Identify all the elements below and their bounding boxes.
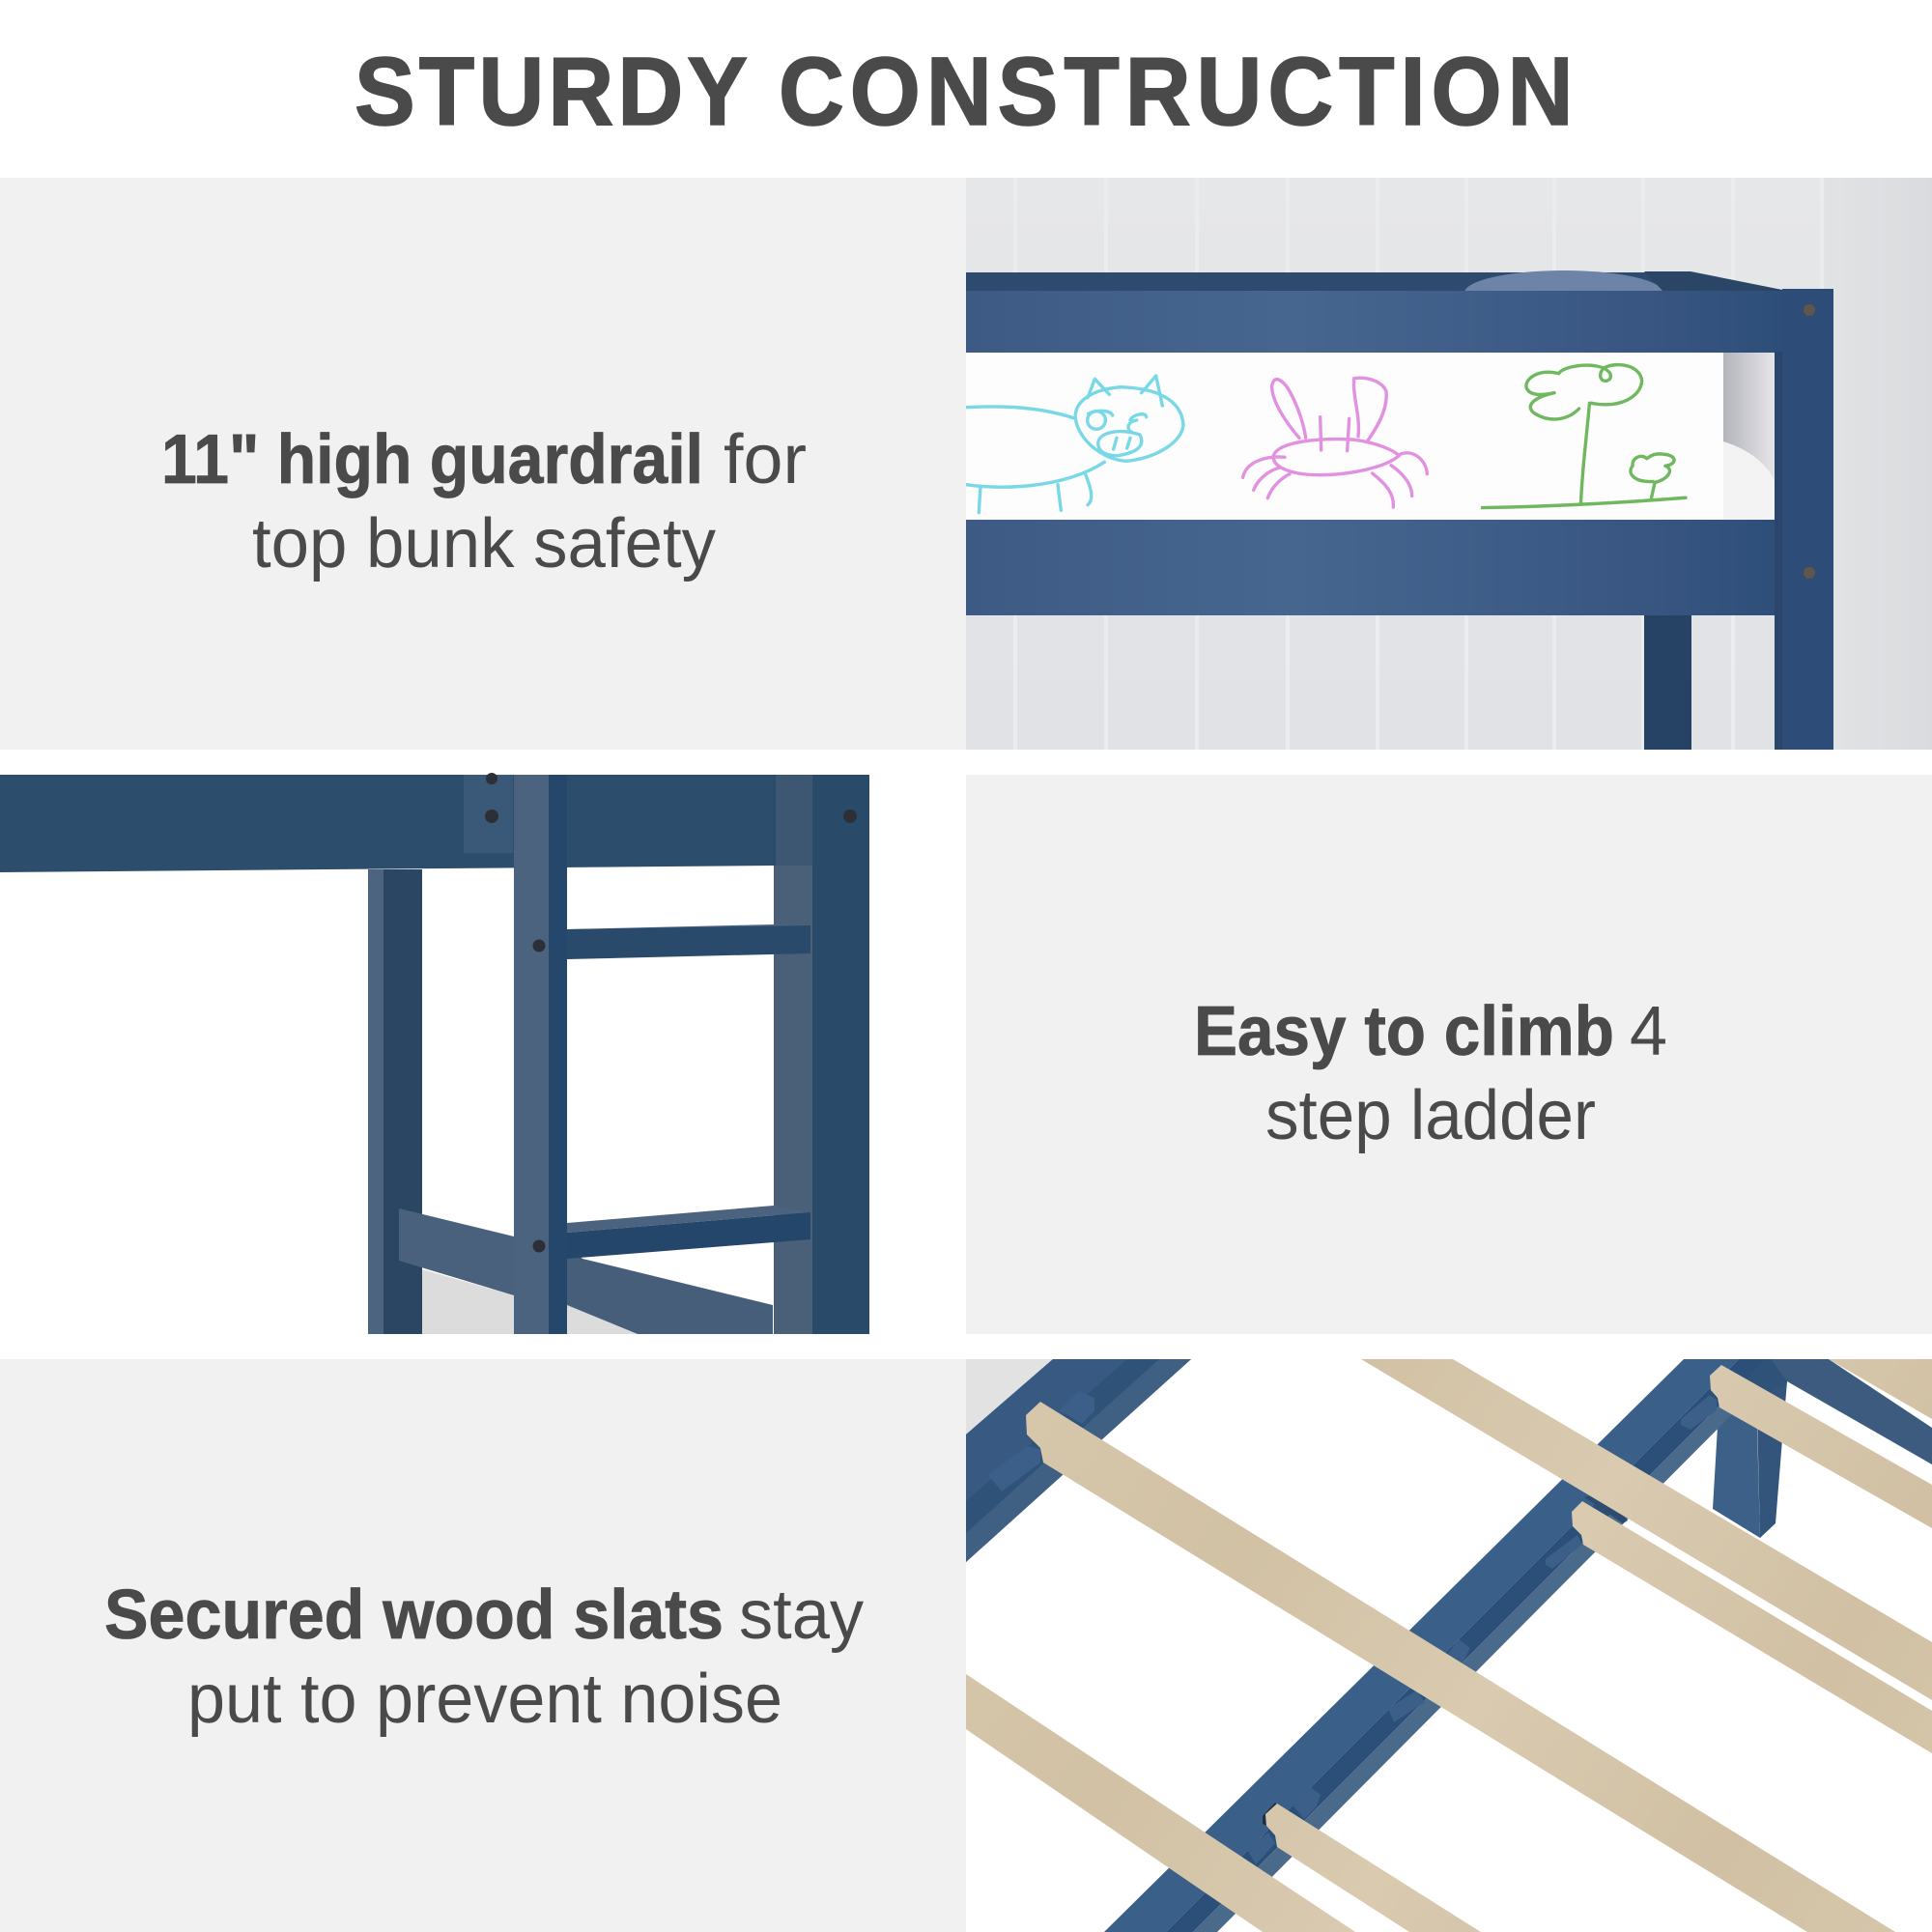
panel: guardrail caption: 11" high guardrail (161, 421, 703, 498)
panel: slats photo (966, 1359, 1932, 1932)
left post (368, 869, 422, 1334)
panel: ladder caption: Easy to climb (1194, 993, 1614, 1070)
rung lower (567, 1206, 810, 1259)
pillow (1464, 270, 1662, 291)
panel: guardrail caption: for (724, 421, 807, 498)
panel: slats caption: Secured wood slats (104, 1577, 724, 1654)
panel: slats caption: stay (739, 1577, 864, 1654)
panel: ladder caption (966, 775, 1932, 1334)
rail: left (966, 1359, 1191, 1562)
rail: center (1104, 1359, 1766, 1932)
wood slats (966, 1359, 1932, 1932)
front post (1775, 289, 1833, 750)
ladder rail (514, 775, 567, 1334)
lower guardrail (966, 520, 1782, 615)
drawings (966, 376, 1427, 513)
side rail (1644, 271, 1782, 292)
back post (1644, 615, 1691, 750)
panel: guardrail caption (0, 178, 966, 750)
title (355, 37, 1573, 146)
wall planks (1015, 178, 1822, 750)
panel: ladder caption: 4 (1630, 993, 1667, 1070)
panel: guardrail photo (966, 178, 1932, 750)
drawing: pig (966, 376, 1183, 513)
post joint (1747, 1359, 1787, 1385)
beam (0, 775, 869, 872)
panel: guardrail caption: top bunk safety (252, 505, 716, 582)
drawing: rabbit (1243, 378, 1427, 507)
wood: top right corner (1829, 1359, 1932, 1419)
lower diagonal rail (399, 1208, 773, 1334)
rung upper (567, 924, 810, 959)
whiteboard (966, 353, 1723, 521)
top guardrail (966, 291, 1782, 353)
rail cleats (1246, 1395, 1717, 1864)
panel: ladder caption: step ladder (1265, 1077, 1596, 1154)
title: CONSTRUCTION (779, 37, 1573, 146)
title: STURDY (355, 37, 748, 146)
panel: ladder photo (0, 773, 869, 1334)
inner rail (966, 272, 1666, 292)
panel: slats caption: put to prevent noise (187, 1661, 782, 1738)
gray corner (966, 1359, 1053, 1435)
slat shadows (1584, 1495, 1628, 1523)
back post (1713, 1372, 1787, 1538)
gray floor (422, 1269, 514, 1334)
back opening with mattress (1723, 353, 1766, 466)
bracket (464, 775, 513, 853)
panel: slats caption (0, 1359, 966, 1932)
rail: top right (1771, 1359, 1932, 1464)
bolts (485, 773, 857, 1252)
drawing: tree (1482, 365, 1686, 508)
right post (774, 775, 869, 1334)
